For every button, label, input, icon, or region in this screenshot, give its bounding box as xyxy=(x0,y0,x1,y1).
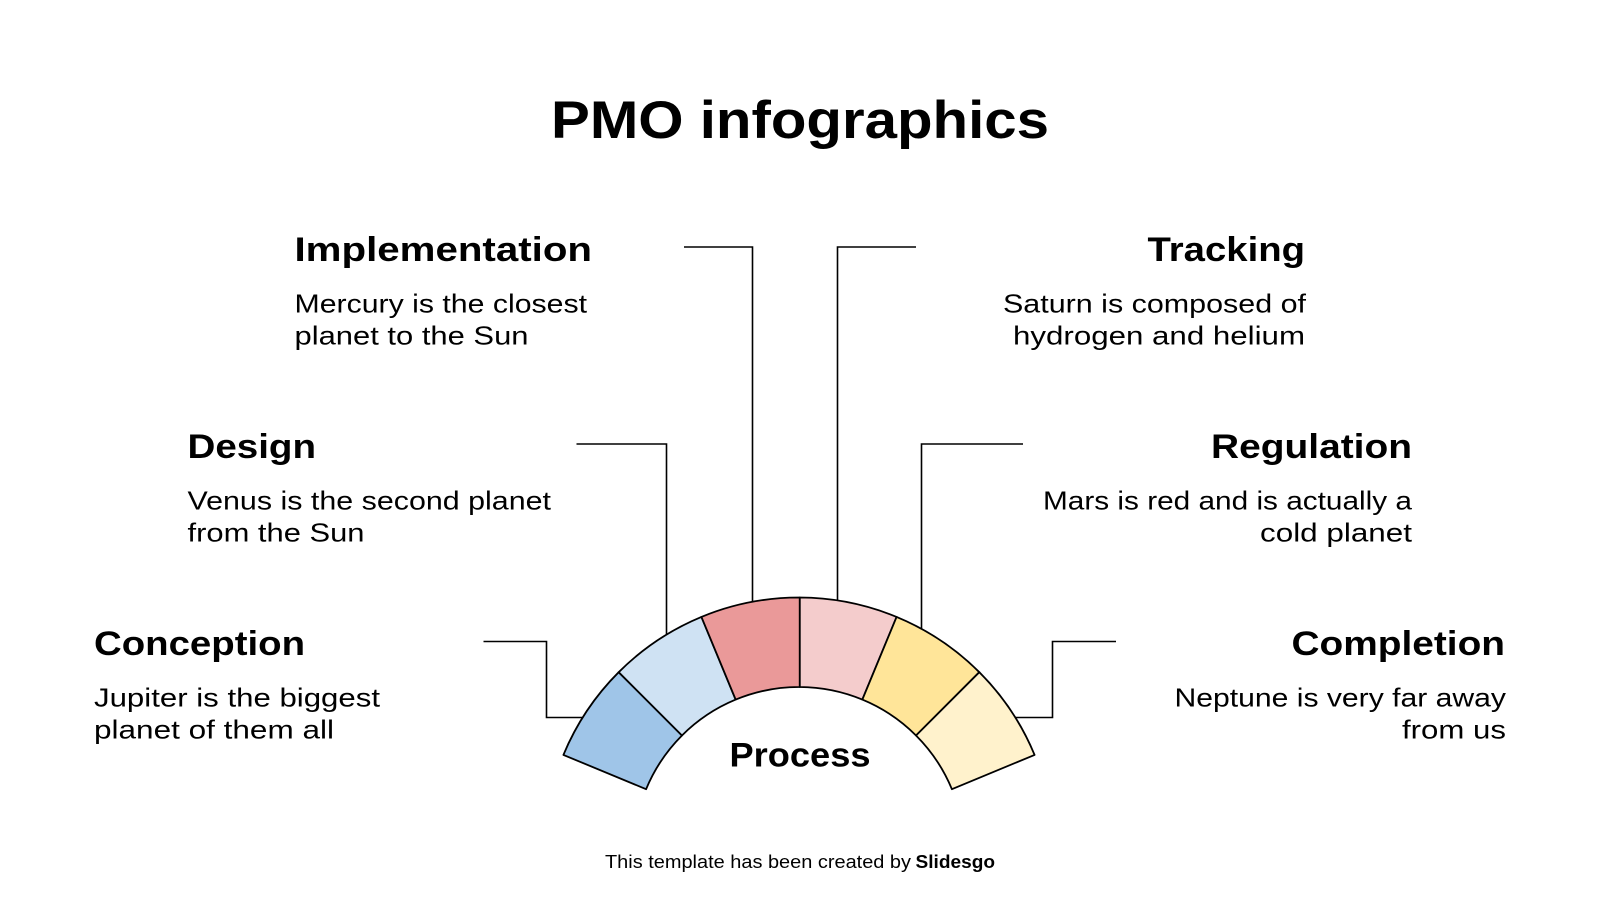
connector: conception xyxy=(484,642,590,718)
text: conception xyxy=(94,682,381,744)
connector: design xyxy=(576,444,666,640)
block: regulation xyxy=(1043,428,1413,548)
heading: completion: Completion xyxy=(1292,625,1505,663)
text: completion xyxy=(1174,682,1506,744)
connector: tracking xyxy=(838,247,916,610)
text: design xyxy=(188,486,552,548)
segment: regulation xyxy=(862,617,979,735)
text: conception: planet of them all xyxy=(94,714,334,744)
block: conception xyxy=(94,625,381,744)
text: conception: Jupiter is the biggest xyxy=(94,682,381,712)
process arc xyxy=(563,597,1035,789)
text: implementation xyxy=(294,288,588,350)
text: regulation xyxy=(1043,486,1413,548)
footer credit: This template has been created by xyxy=(605,852,911,872)
text: design: Venus is the second planet xyxy=(188,486,552,516)
footer credit: Slidesgo xyxy=(916,852,995,872)
block: tracking xyxy=(1003,231,1307,350)
text: regulation: Mars is red and is actually a xyxy=(1043,486,1413,516)
text: completion: from us xyxy=(1402,714,1506,744)
block: design xyxy=(188,428,552,548)
heading: regulation: Regulation xyxy=(1211,428,1412,466)
process label: Process xyxy=(730,736,870,774)
connector: regulation xyxy=(922,444,1023,640)
connector: completion xyxy=(1010,642,1116,718)
text: completion: Neptune is very far away xyxy=(1174,682,1506,712)
heading: implementation: Implementation xyxy=(294,231,592,269)
text: regulation: cold planet xyxy=(1260,518,1413,548)
text: implementation: Mercury is the closest xyxy=(294,288,588,318)
segment: completion xyxy=(916,672,1035,789)
block: completion xyxy=(1174,625,1506,744)
segment: design xyxy=(619,617,736,735)
segment: tracking xyxy=(800,598,897,700)
connector: implementation xyxy=(684,247,752,610)
heading: tracking: Tracking xyxy=(1148,231,1305,269)
segment: implementation xyxy=(701,597,800,700)
text: implementation: planet to the Sun xyxy=(294,320,528,350)
segment: conception xyxy=(563,672,682,789)
text: tracking xyxy=(1003,288,1307,350)
heading: conception: Conception xyxy=(94,625,305,663)
heading: design: Design xyxy=(188,428,316,466)
block: implementation xyxy=(294,231,592,350)
text: tracking: hydrogen and helium xyxy=(1013,320,1305,350)
text: tracking: Saturn is composed of xyxy=(1003,288,1307,318)
text: design: from the Sun xyxy=(188,518,364,548)
title: PMO infographics xyxy=(551,91,1049,150)
